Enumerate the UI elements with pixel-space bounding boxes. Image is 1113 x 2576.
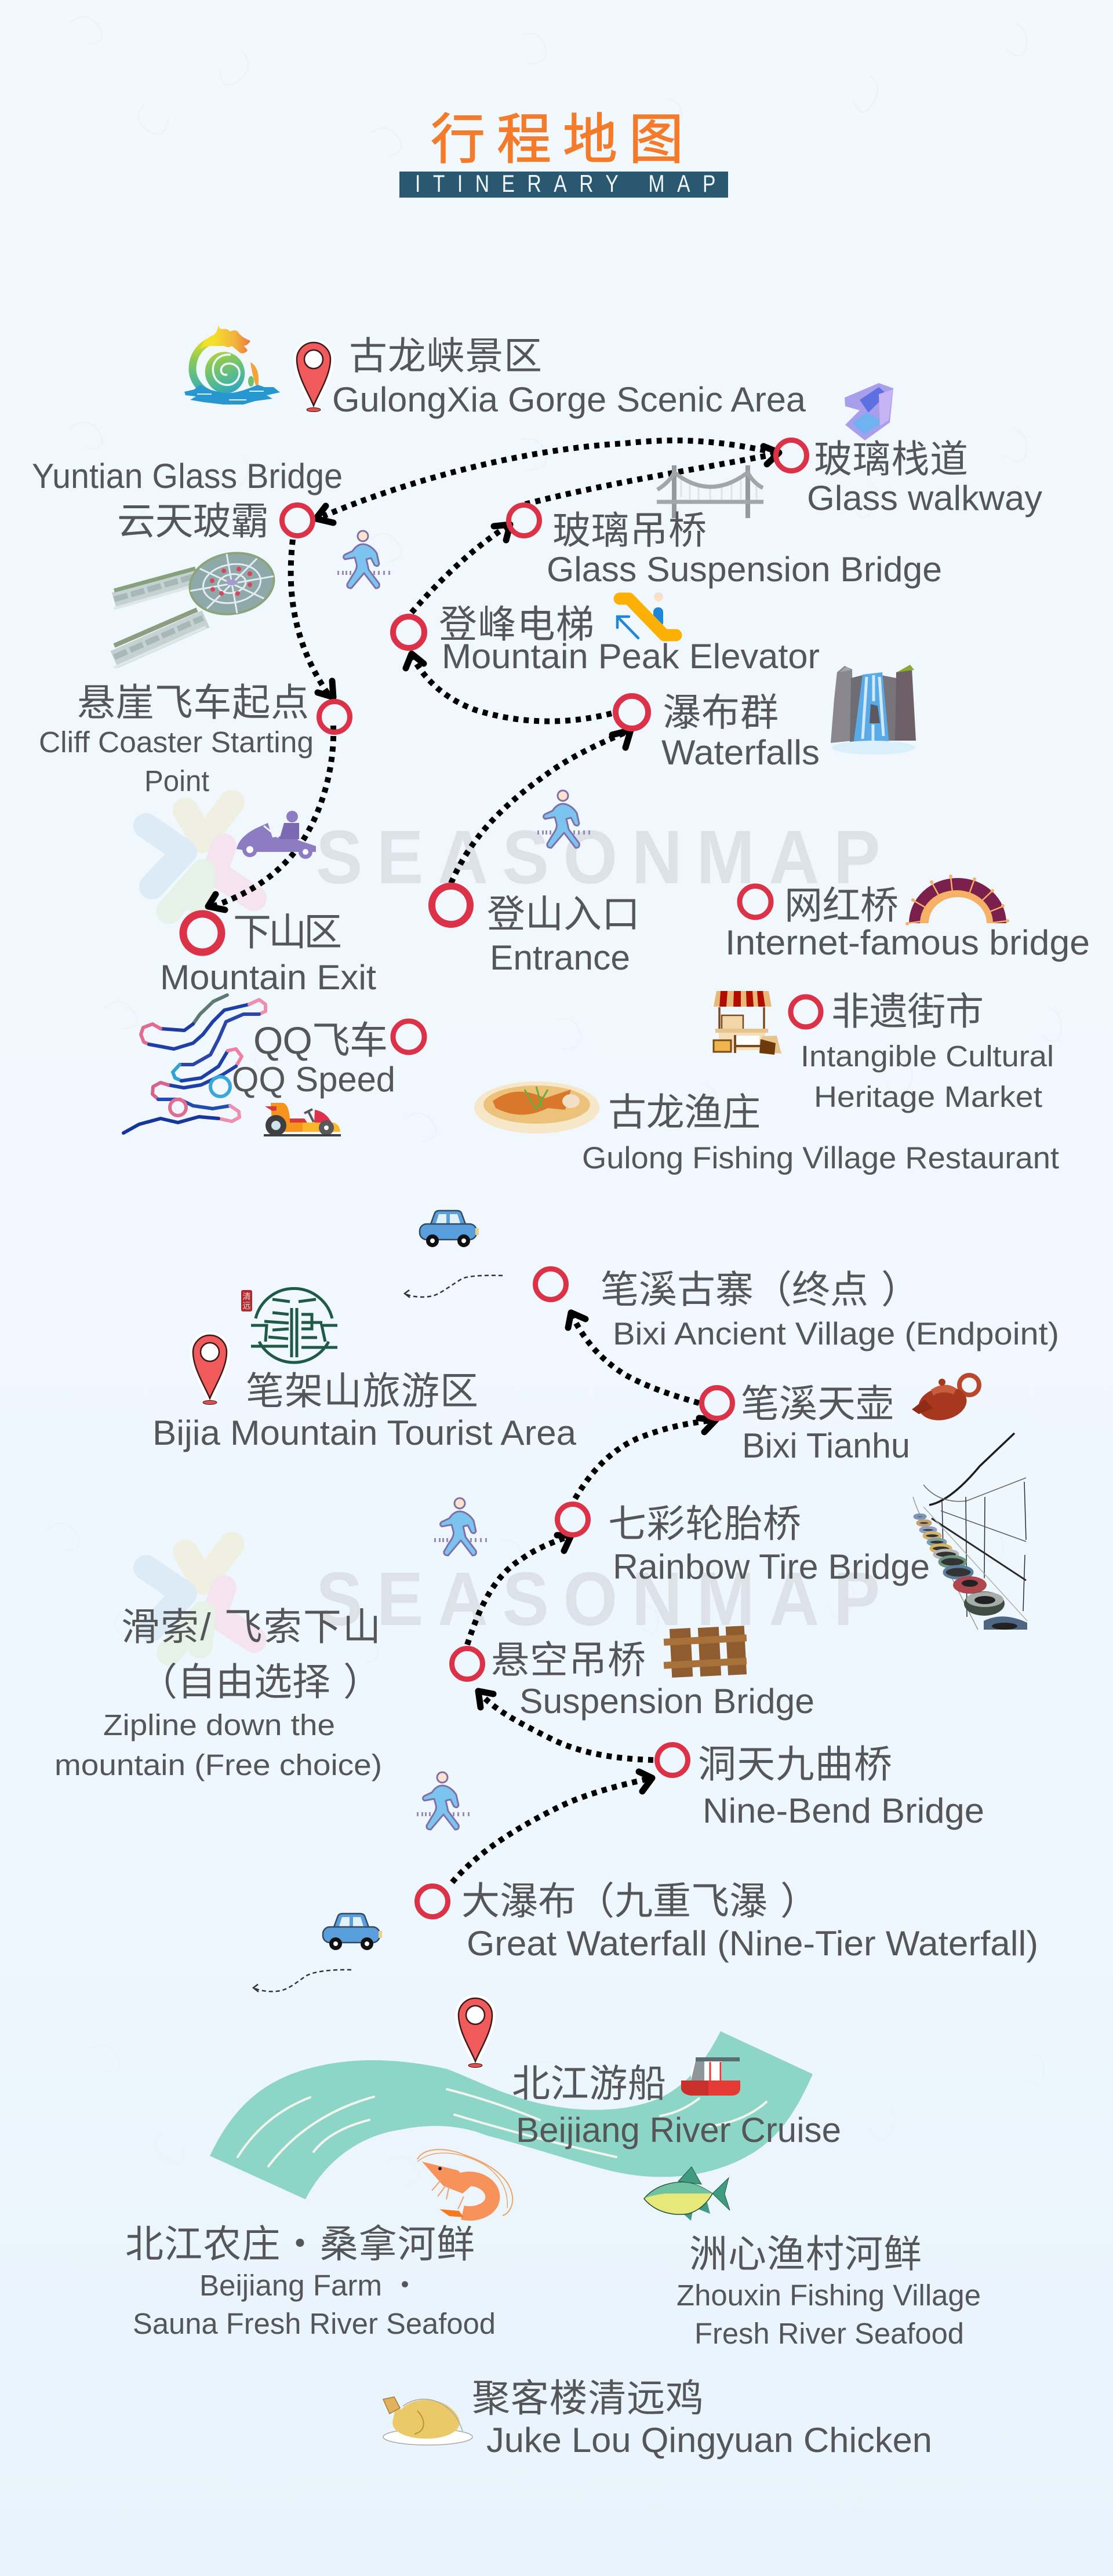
label: Rainbow Tire Bridge	[613, 1547, 930, 1586]
label: 登山入口	[487, 892, 640, 935]
label: Gulong Fishing Village Restaurant	[582, 1141, 1059, 1175]
heading: Gulongxia: GulongXia Gorge Scenic Area	[332, 380, 806, 419]
label: Nine-Bend Bridge	[703, 1791, 984, 1830]
icon: purple go-kart	[237, 811, 316, 859]
stop: zipline option: mountain (Free choice)	[54, 1748, 382, 1781]
river shape	[210, 2031, 813, 2199]
icon: walking person 4	[417, 1772, 470, 1830]
node marker	[319, 701, 350, 733]
label	[39, 681, 314, 797]
stop: Gulong fishing village	[474, 1081, 1059, 1175]
label	[160, 910, 376, 997]
node marker	[701, 1387, 733, 1419]
icon: location pin	[459, 1998, 492, 2069]
route arrows	[208, 440, 779, 1882]
label: Yuntian Glass Bridge	[32, 457, 343, 495]
label	[698, 1743, 984, 1830]
label: Glass Suspension Bridge	[547, 550, 942, 589]
label	[32, 457, 343, 542]
label: glass walkway: Glass walkway	[807, 479, 1042, 518]
walking person icons	[337, 531, 590, 1830]
label	[608, 1502, 930, 1586]
watermark: Seasonmap lower	[146, 1544, 880, 1653]
stop: entrance	[432, 886, 640, 977]
heading: Gulongxia	[332, 334, 806, 419]
label	[725, 884, 1090, 962]
arrow: walkway to Yuntian	[316, 440, 776, 523]
stop: zipline option	[54, 1605, 382, 1781]
arrow: tianhu to ancient village	[568, 1313, 699, 1403]
arrow: rainbow tire to tianhu	[575, 1418, 716, 1499]
label: 非遗街市	[831, 990, 984, 1033]
label	[461, 1879, 1038, 1963]
icon: market stall	[714, 991, 781, 1055]
label: 登峰电梯	[439, 603, 594, 646]
label: Zhouxin fishing village: 洲心渔村河鲜	[689, 2232, 922, 2275]
section: Gulongxia scenic area	[184, 323, 806, 419]
label: Juke Lou: Juke Lou Qingyuan Chicken	[486, 2421, 932, 2460]
label	[582, 1091, 1059, 1175]
icon: shrimp	[417, 2149, 512, 2217]
icon: walking person 1	[337, 531, 390, 588]
heading: Gulongxia: 古龙峡景区	[349, 334, 542, 377]
label	[439, 603, 820, 676]
label: Cliff Coaster Starting	[39, 726, 314, 759]
label	[661, 691, 820, 772]
label: Waterfalls	[661, 733, 820, 772]
label: 古龙渔庄	[608, 1091, 761, 1134]
stop: zipline option: （自由选择 ）	[139, 1660, 381, 1703]
label: Point	[144, 764, 209, 797]
stop: Bixi Tianhu	[701, 1375, 979, 1465]
node marker	[432, 886, 470, 924]
icon: plank bridge	[664, 1626, 747, 1678]
icon: dragon logo	[184, 323, 280, 405]
node marker	[558, 1504, 588, 1535]
stop: cliff coaster start	[39, 681, 350, 859]
icon: teapot	[912, 1375, 979, 1424]
label: glass walkway: 玻璃栈道	[814, 438, 968, 480]
stop: Bixi ancient village	[536, 1268, 1059, 1351]
node marker	[509, 505, 539, 535]
label: QQ飞车	[253, 1019, 388, 1062]
icon: glass crystal	[845, 383, 893, 440]
label: Bijia Mountain Tourist Area	[152, 1413, 577, 1452]
icon: arch bridge	[905, 875, 1009, 926]
arrow: great waterfall to nine-bend	[452, 1772, 652, 1882]
label: Mountain Peak Elevator	[442, 637, 820, 676]
label: Entrance	[490, 938, 630, 977]
icon: walking person 2	[537, 790, 590, 848]
stop: QQ speed	[123, 995, 424, 1136]
label: Beijiang farm: Beijiang Farm	[199, 2269, 382, 2302]
arrow: waterfalls to elevator	[406, 654, 612, 722]
label: Beijiang farm: Sauna Fresh River Seafood	[133, 2307, 496, 2340]
arrow: elevator to suspension bridge	[412, 524, 510, 613]
subtitle banner: ITINERARY MAP	[415, 171, 715, 198]
node marker	[791, 997, 821, 1027]
stop: Yuntian glass bridge	[32, 457, 343, 542]
label	[152, 1369, 577, 1452]
icon: Bijia logo: 远	[242, 1301, 250, 1310]
icon: boat	[681, 2057, 740, 2096]
icon: location pin	[297, 343, 330, 413]
label: glass walkway	[807, 438, 1042, 518]
label: Zhouxin fishing village: Zhouxin Fishing Village	[676, 2279, 981, 2312]
section: Beijiang river	[125, 1998, 981, 2460]
arrow: thin dashed lower	[253, 1970, 351, 1992]
label: Intangible Cultural	[801, 1040, 1054, 1073]
label: Zhouxin fishing village: Fresh River Seafood	[694, 2317, 964, 2350]
label: Juke Lou	[472, 2377, 932, 2460]
arrow: suspension bridge to walkway	[525, 446, 779, 504]
icon: chicken plate	[383, 2397, 472, 2445]
section: Bijia mountain tourist area	[152, 1288, 577, 1452]
icon: location pin	[193, 1335, 227, 1406]
label: QQ Speed	[232, 1060, 395, 1099]
stop: internet-famous bridge	[725, 875, 1090, 962]
stop: intangible heritage market	[714, 990, 1054, 1113]
node marker	[452, 1648, 482, 1679]
label: Beijiang river cruise: Beijiang River Cruise	[516, 2111, 841, 2149]
icon: QQ speed track	[123, 995, 265, 1133]
photo: Yuntian glass platform	[114, 546, 279, 668]
label: Internet-famous bridge	[725, 923, 1090, 962]
label: Suspension Bridge	[519, 1682, 814, 1721]
stop: great waterfall	[417, 1879, 1038, 1963]
icon: suspension bridge	[657, 465, 763, 518]
label: 悬空吊桥	[491, 1638, 646, 1681]
watermark: Seasonmap upper	[146, 803, 880, 911]
label: 云天玻霸	[117, 500, 269, 542]
photo: tire bridge	[913, 1433, 1027, 1630]
label: 大瀑布（九重飞瀑 ）	[461, 1879, 819, 1922]
icon: go-kart	[264, 1103, 341, 1136]
icon: car lower	[323, 1914, 382, 1950]
node marker	[616, 696, 648, 728]
stop: glass walkway	[776, 383, 893, 471]
node marker	[183, 914, 221, 952]
arrow: Yuntian to cliff coaster	[291, 540, 333, 697]
label: Heritage Market	[814, 1080, 1042, 1113]
stop: mountain peak elevator	[393, 592, 820, 676]
node marker	[393, 617, 424, 648]
stop: glass suspension bridge	[509, 465, 942, 589]
river wave marks	[238, 2089, 766, 2166]
stop: zipline option: Zipline down the	[103, 1708, 335, 1741]
stop: nine-bend bridge	[657, 1743, 984, 1830]
label	[491, 1638, 814, 1721]
label: 下山区	[233, 910, 342, 953]
label: Mountain Exit	[160, 958, 376, 997]
icon: escalator	[617, 592, 676, 638]
node marker	[282, 505, 313, 535]
icon: green fish	[644, 2167, 730, 2221]
label: Beijiang river cruise: 北江游船	[512, 2062, 666, 2105]
node marker	[393, 1021, 424, 1052]
label	[601, 1268, 1059, 1351]
label: 网红桥	[784, 884, 899, 927]
label: 瀑布群	[663, 691, 779, 734]
icon: fish plate	[474, 1081, 599, 1134]
stop: rainbow tire bridge	[558, 1433, 1027, 1630]
icon: waterfall illustration	[831, 665, 916, 755]
label: 笔溪古寨（终点 ）	[601, 1268, 919, 1311]
node marker	[536, 1269, 566, 1299]
node marker	[657, 1744, 688, 1776]
label: Juke Lou: 聚客楼清远鸡	[472, 2377, 704, 2420]
stop: zipline option: 滑索/ 飞索下山	[121, 1605, 381, 1648]
icon: Bijia logo	[241, 1288, 337, 1362]
label: Beijiang river cruise	[512, 2062, 841, 2149]
title: 行程地图: 行程地图	[431, 109, 683, 170]
node marker	[776, 440, 807, 471]
label: Zhouxin fishing village	[676, 2232, 981, 2350]
icon: car upper	[420, 1211, 479, 1247]
label: 悬崖飞车起点	[77, 681, 309, 724]
node marker	[740, 886, 771, 917]
label: 笔架山旅游区	[246, 1369, 478, 1412]
label: Great Waterfall (Nine-Tier Waterfall)	[467, 1924, 1038, 1963]
label: Beijiang farm	[125, 2222, 496, 2340]
label: Beijiang farm: 北江农庄・桑拿河鲜	[125, 2222, 475, 2265]
arrow: entrance to waterfalls	[451, 730, 631, 883]
label: 洞天九曲桥	[698, 1743, 892, 1786]
label	[741, 1382, 910, 1465]
stop: suspension bridge	[452, 1626, 814, 1721]
label: Bixi Ancient Village (Endpoint)	[613, 1316, 1059, 1351]
label	[801, 990, 1054, 1113]
stop: waterfalls	[616, 665, 916, 772]
arrow: cliff coaster to exit	[208, 726, 333, 910]
label: 笔溪天壶	[741, 1382, 894, 1425]
label: 玻璃吊桥	[552, 509, 707, 552]
label: Bixi Tianhu	[742, 1426, 910, 1465]
title block	[399, 109, 728, 198]
icon: Bijia logo: 清	[242, 1292, 250, 1301]
stop: mountain exit	[160, 910, 376, 997]
label	[232, 1019, 395, 1099]
arrow: suspension to rainbow tire	[467, 1535, 571, 1645]
arrow: nine-bend to suspension	[478, 1691, 653, 1760]
label: 七彩轮胎桥	[608, 1502, 801, 1545]
icon: walking person 3	[434, 1498, 487, 1555]
arrow: thin dashed upper	[405, 1276, 503, 1298]
label	[547, 509, 942, 589]
label	[487, 892, 640, 977]
node marker	[417, 1886, 448, 1917]
label: Beijiang farm: ・	[390, 2269, 420, 2302]
